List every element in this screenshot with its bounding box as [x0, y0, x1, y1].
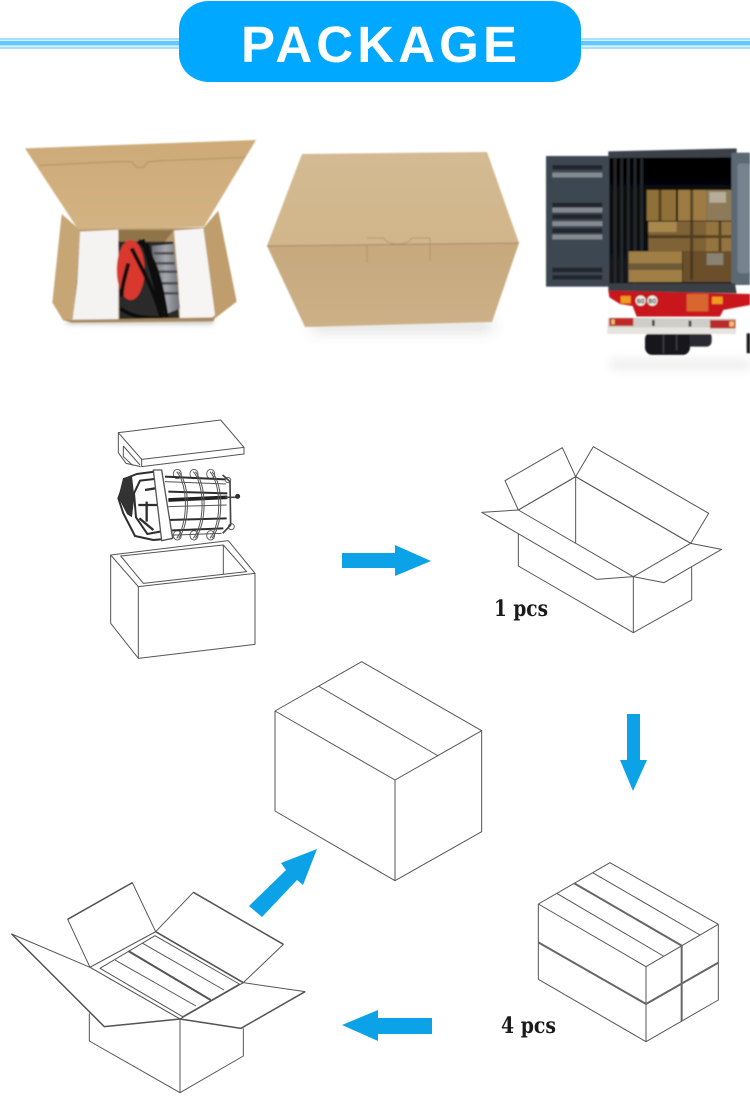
- back left flap: [505, 448, 576, 510]
- left door: [546, 156, 610, 287]
- front lip: [63, 317, 215, 323]
- outer block: [538, 863, 718, 1042]
- arrow: diagonal up: [249, 849, 317, 917]
- decorative stripes left and right of the banner: [0, 38, 750, 49]
- front face: [267, 243, 519, 327]
- cage end and handle: [223, 475, 238, 533]
- packed cartons: [100, 932, 243, 1017]
- arrow: down: [620, 714, 647, 791]
- carton interior: [73, 227, 215, 319]
- lamp and power cord: [117, 239, 180, 319]
- photo: container truck: [546, 148, 750, 370]
- arrow: to carton: [342, 545, 431, 576]
- back right flap: [576, 447, 709, 543]
- red chassis: 80: [648, 298, 656, 305]
- step 2: single open carton: [482, 447, 722, 633]
- step 4: master carton packed open: [12, 883, 305, 1093]
- left foam: [73, 230, 118, 319]
- opening edges: [90, 932, 243, 1019]
- header banner: [0, 1, 750, 82]
- container bottom frame: [608, 283, 737, 293]
- banner pill: [179, 1, 581, 82]
- ground shadow: [610, 358, 750, 370]
- title: PACKAGE: [241, 16, 517, 73]
- step 3: stack of four cartons: [538, 863, 718, 1042]
- tape seam: [318, 686, 438, 756]
- carton body: [518, 533, 692, 633]
- photo: open carton with lamp: [25, 140, 256, 324]
- closure tab: [367, 238, 430, 263]
- back right flap: [156, 892, 283, 983]
- cargo cartons: [629, 190, 732, 282]
- foam lid: [118, 420, 244, 467]
- work lamp with cage: [118, 469, 240, 541]
- label: 1 pcs: 1 pcs: [494, 596, 548, 622]
- label: 4 pcs: 4 pcs: [501, 1013, 556, 1039]
- carton body: [89, 1013, 243, 1093]
- step 1: foam, lamp and foam base: [111, 420, 255, 658]
- lamp head: [118, 472, 172, 540]
- open lid flap: [25, 140, 256, 231]
- carton seams: [538, 873, 718, 1021]
- foam base: [111, 541, 255, 658]
- cage ribs: [177, 472, 221, 538]
- front corner: [393, 780, 396, 881]
- top face: [275, 662, 482, 780]
- shadow: [312, 322, 492, 330]
- left wall: [52, 214, 79, 321]
- right flap: [633, 543, 722, 583]
- container interior: [609, 157, 733, 285]
- right foam: [174, 228, 215, 319]
- shadow: [67, 318, 213, 324]
- front edge: [267, 243, 519, 246]
- body: [275, 711, 482, 881]
- rear bumper with lights: [607, 318, 736, 334]
- photo: closed carton: [267, 152, 519, 330]
- front corner: [178, 1019, 181, 1093]
- arrow: left: [342, 1010, 432, 1041]
- carton inside: [518, 477, 691, 543]
- container top frame: [608, 148, 737, 158]
- right flap: [180, 983, 305, 1028]
- right wall: [204, 211, 237, 318]
- red chassis: 60: [637, 298, 645, 305]
- right door: [731, 153, 750, 285]
- cage loops: [173, 469, 234, 540]
- front corner: [632, 577, 635, 633]
- corrugated side wall: [615, 158, 642, 283]
- step 5: sealed master carton: [275, 662, 482, 881]
- wheels: [645, 332, 750, 355]
- heavy flap edges: [12, 883, 305, 1028]
- left flap: [12, 934, 180, 1027]
- red chassis: [608, 291, 750, 317]
- cage rods: [165, 477, 227, 531]
- left flap: [482, 510, 633, 579]
- back left flap: [68, 883, 156, 967]
- top face: [267, 152, 519, 246]
